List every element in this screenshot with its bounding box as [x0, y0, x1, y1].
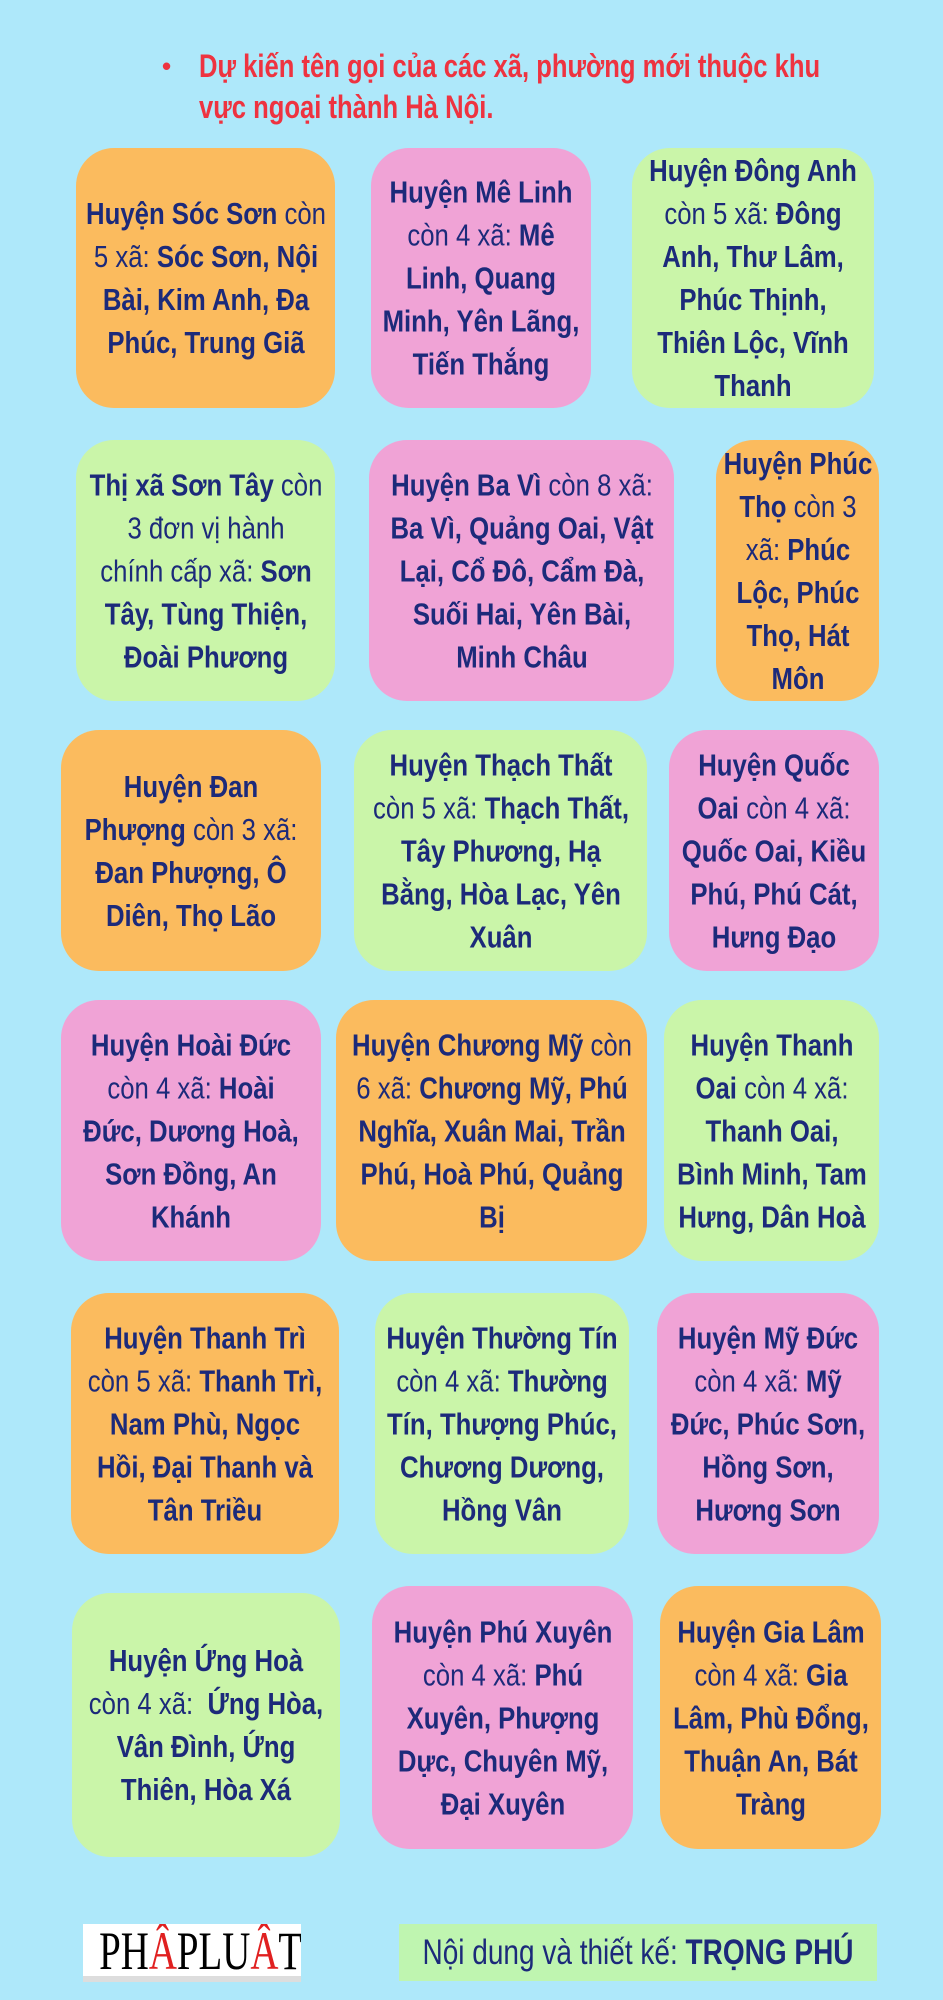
- panel: Thanh Trì: Huyện Thanh Trì: [104, 1320, 306, 1355]
- panel: Mỹ Đức: Hương Sơn: [695, 1492, 841, 1527]
- panel: Thường Tín: còn 4 xã: Thường: [396, 1363, 608, 1398]
- panel: Phúc Thọ: Lộc, Phúc: [736, 574, 859, 610]
- panel: Ba Vì: Lại, Cổ Đô, Cẩm Đà,: [399, 553, 644, 588]
- panel: Hoài Đức: Khánh: [151, 1199, 231, 1234]
- panel: Đan Phượng: Huyện Đan: [124, 768, 258, 804]
- panel: Thanh Trì: còn 5 xã: Thanh Trì,: [88, 1363, 322, 1398]
- panel: Sơn Tây: chính cấp xã: Sơn: [100, 553, 311, 588]
- panel: Đan Phượng: Diên, Thọ Lão: [106, 898, 276, 932]
- panel: Thanh Oai: Hưng, Dân Hoà: [678, 1199, 865, 1234]
- panel: Ba Vì: Minh Châu: [456, 639, 587, 674]
- panel: Ứng Hoà: Thiên, Hòa Xá: [121, 1772, 291, 1807]
- panel: Phú Xuyên: [372, 1586, 633, 1849]
- panel: Mê Linh: Tiến Thắng: [413, 346, 549, 382]
- panel: Đông Anh: [632, 148, 874, 408]
- panel: Gia Lâm: Tràng: [735, 1786, 806, 1821]
- panel: Mê Linh: [371, 148, 591, 408]
- panel: Hoài Đức: Sơn Đồng, An: [105, 1156, 277, 1191]
- panel: Phú Xuyên: Đại Xuyên: [440, 1786, 565, 1821]
- panel: Hoài Đức: Đức, Dương Hoà,: [83, 1113, 299, 1148]
- panel: Ba Vì: Suối Hai, Yên Bài,: [412, 596, 631, 631]
- panel: Mỹ Đức: còn 4 xã: Mỹ: [694, 1363, 842, 1398]
- panel: Sơn Tây: Đoài Phương: [123, 639, 288, 674]
- panel: Mỹ Đức: [657, 1293, 879, 1554]
- panel: Phúc Thọ: Thọ còn 3: [739, 488, 856, 524]
- panel: Chương Mỹ: Phú, Hoà Phú, Quảng: [360, 1156, 623, 1191]
- panel: Sơn Tây: Tây, Tùng Thiện,: [104, 596, 307, 631]
- panel: Quốc Oai: Hưng Đạo: [712, 919, 836, 954]
- panel: Đông Anh: Phúc Thịnh,: [679, 282, 827, 317]
- panel: Đông Anh: Huyện Đông Anh: [649, 153, 857, 188]
- panel: Thanh Oai: Oai còn 4 xã:: [695, 1070, 848, 1105]
- panel: Quốc Oai: [669, 730, 879, 971]
- panel: Phú Xuyên: Dực, Chuyên Mỹ,: [397, 1743, 608, 1778]
- panel: Đông Anh: Anh, Thư Lâm,: [662, 239, 844, 274]
- panel: Thanh Oai: Bình Minh, Tam: [677, 1156, 866, 1191]
- panel: Mỹ Đức: Hồng Sơn,: [702, 1449, 834, 1484]
- panel: Thường Tín: [375, 1293, 629, 1554]
- panel: Mê Linh: Linh, Quang: [406, 260, 556, 296]
- panel: Hoài Đức: [61, 1000, 321, 1261]
- panel: Chương Mỹ: Nghĩa, Xuân Mai, Trần: [358, 1113, 625, 1148]
- panel: Mê Linh: Huyện Mê Linh: [390, 174, 572, 210]
- panel: Đan Phượng: Đan Phượng, Ô: [95, 854, 287, 890]
- panel: Thạch Thất: còn 5 xã: Thạch Thất,: [373, 790, 628, 825]
- panel: Chương Mỹ: Huyện Chương Mỹ còn: [352, 1027, 631, 1062]
- panel: Thanh Oai: [664, 1000, 879, 1261]
- panel: Quốc Oai: Phú, Phú Cát,: [690, 876, 858, 911]
- panel: Phúc Thọ: Huyện Phúc: [723, 446, 872, 480]
- panel: Đan Phượng: [61, 730, 321, 971]
- panel: Gia Lâm: Lâm, Phù Đổng,: [673, 1700, 868, 1735]
- panel: Thạch Thất: Bằng, Hòa Lạc, Yên: [381, 876, 620, 911]
- panel: Hoài Đức: Huyện Hoài Đức: [91, 1027, 291, 1062]
- panel: Chương Mỹ: 6 xã: Chương Mỹ, Phú: [356, 1070, 627, 1105]
- panel: Ứng Hoà: Huyện Ứng Hoà: [109, 1643, 303, 1678]
- panel: Đông Anh: còn 5 xã: Đông: [664, 196, 842, 231]
- title: Dự kiến tên gọi của các xã, phường mới thuộc khu: [199, 48, 820, 84]
- panel: Thanh Trì: Hồi, Đại Thanh và: [97, 1449, 313, 1484]
- panel: Thường Tín: Huyện Thường Tín: [386, 1320, 618, 1355]
- panel: Thanh Oai: Thanh Oai,: [705, 1113, 838, 1148]
- panel: Thạch Thất: Tây Phương, Hạ: [401, 833, 600, 868]
- panel: Ứng Hoà: Vân Đình, Ứng: [117, 1729, 295, 1764]
- panel: Thường Tín: Tín, Thượng Phúc,: [387, 1406, 617, 1441]
- panel: Phú Xuyên: Xuyên, Phượng: [406, 1700, 599, 1735]
- panel: Thường Tín: Hồng Vân: [442, 1492, 562, 1527]
- panel: Mỹ Đức: Đức, Phúc Sơn,: [671, 1406, 865, 1441]
- panel: Thạch Thất: Huyện Thạch Thất: [389, 747, 612, 782]
- panel: Sóc Sơn: Huyện Sóc Sơn còn: [86, 196, 325, 231]
- title: vực ngoại thành Hà Nội.: [199, 89, 493, 125]
- panel: Thanh Trì: [71, 1293, 339, 1554]
- panel: Ứng Hoà: còn 4 xã: Ứng Hòa,: [89, 1686, 323, 1721]
- credit: [399, 1924, 877, 1981]
- panel: Mỹ Đức: Huyện Mỹ Đức: [678, 1320, 858, 1355]
- panel: Đan Phượng: Phượng còn 3 xã:: [85, 812, 297, 846]
- credit: Nội dung và thiết kế: TRỌNG PHÚ: [422, 1932, 854, 1972]
- panel: Chương Mỹ: Bị: [479, 1199, 504, 1234]
- panel: Quốc Oai: Oai còn 4 xã:: [697, 790, 851, 825]
- panel: Phúc Thọ: Môn: [771, 660, 824, 696]
- panel: Gia Lâm: Huyện Gia Lâm: [677, 1614, 864, 1649]
- panel: Thanh Trì: Nam Phù, Ngọc: [110, 1406, 300, 1441]
- panel: Gia Lâm: [660, 1586, 881, 1849]
- panel: Thanh Oai: Huyện Thanh: [690, 1027, 853, 1062]
- panel: Thanh Trì: Tân Triều: [148, 1492, 262, 1527]
- panel: Gia Lâm: Thuận An, Bát: [684, 1743, 857, 1778]
- title: •: [162, 51, 171, 81]
- panel: Sóc Sơn: 5 xã: Sóc Sơn, Nội: [93, 239, 318, 274]
- panel: Phú Xuyên: còn 4 xã: Phú: [422, 1657, 583, 1692]
- panel: Quốc Oai: Huyện Quốc: [698, 747, 850, 782]
- panel: Mê Linh: Minh, Yên Lãng,: [383, 304, 579, 338]
- panel: Phúc Thọ: xã: Phúc: [745, 532, 850, 566]
- panel: Thường Tín: Chương Dương,: [400, 1449, 604, 1484]
- panel: Phúc Thọ: Thọ, Hát: [746, 618, 849, 652]
- panel: Mê Linh: còn 4 xã: Mê: [407, 218, 555, 252]
- panel: Gia Lâm: còn 4 xã: Gia: [694, 1657, 847, 1692]
- panel: Phú Xuyên: Huyện Phú Xuyên: [393, 1614, 612, 1649]
- title: [162, 48, 820, 125]
- panel: Ứng Hoà: [72, 1593, 340, 1857]
- panel: Hoài Đức: còn 4 xã: Hoài: [107, 1070, 275, 1105]
- panel: Sơn Tây: Thị xã Sơn Tây còn: [89, 467, 322, 502]
- panel: Chương Mỹ: [336, 1000, 647, 1261]
- panel: Phúc Thọ: [716, 440, 879, 701]
- panel: Đông Anh: Thanh: [714, 368, 792, 403]
- panel: Sóc Sơn: Phúc, Trung Giã: [107, 325, 304, 360]
- panel: Thạch Thất: Xuân: [469, 919, 532, 954]
- panel: Ba Vì: [369, 440, 674, 701]
- panel: Ba Vì: Huyện Ba Vì còn 8 xã:: [391, 467, 652, 502]
- panel: Đông Anh: Thiên Lộc, Vĩnh: [657, 325, 849, 360]
- panel: Sóc Sơn: Bài, Kim Anh, Đa: [102, 282, 309, 317]
- panel: Sơn Tây: [76, 440, 335, 701]
- panel: Quốc Oai: Quốc Oai, Kiều: [682, 833, 866, 868]
- panel: Sơn Tây: 3 đơn vị hành: [127, 510, 284, 545]
- panel: Ba Vì: Ba Vì, Quảng Oai, Vật: [390, 510, 653, 545]
- panel: Thạch Thất: [354, 730, 647, 971]
- panel: Sóc Sơn: [76, 148, 335, 408]
